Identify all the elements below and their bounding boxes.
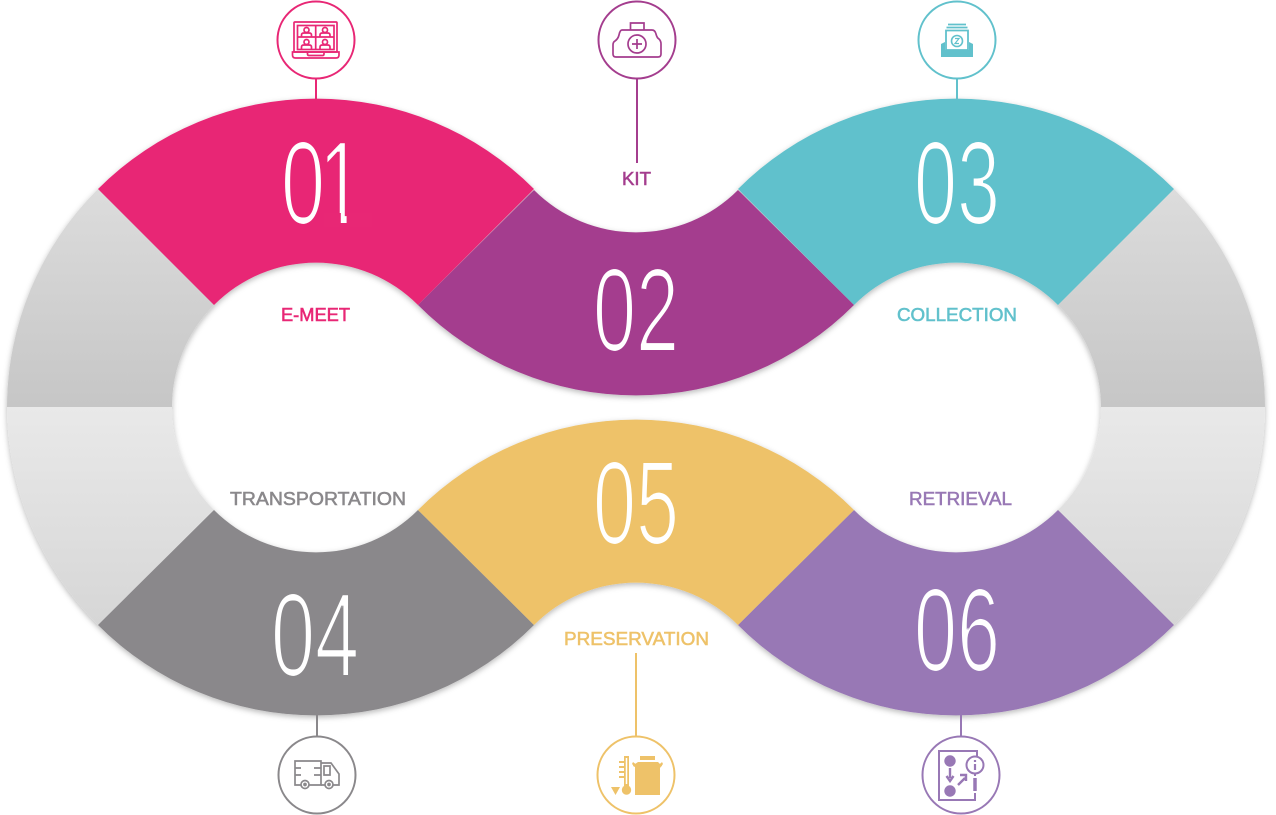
icon: e-meet laptop xyxy=(278,2,354,100)
number 02: 02 xyxy=(593,244,679,377)
infinity ribbon diagram xyxy=(7,99,1265,715)
band: lower left grey xyxy=(7,407,214,625)
icon: retrieval flow xyxy=(922,715,1000,814)
label: E-MEET: E-MEET xyxy=(281,305,350,325)
segment 03 xyxy=(738,99,1174,305)
number 04: 04 xyxy=(271,569,359,702)
number 05: 05 xyxy=(593,437,679,570)
label: COLLECTION: COLLECTION xyxy=(897,305,1017,325)
icon: medical kit xyxy=(598,2,676,163)
icon: delivery truck xyxy=(278,715,356,814)
band: upper right grey xyxy=(1058,189,1265,407)
band: lower right grey xyxy=(1058,407,1265,625)
label: RETRIEVAL: RETRIEVAL xyxy=(909,489,1012,509)
icon: collection inbox xyxy=(918,2,996,100)
segment 05 xyxy=(418,420,854,625)
segment 01 xyxy=(98,99,534,305)
label: TRANSPORTATION: TRANSPORTATION xyxy=(230,489,406,509)
number 06: 06 xyxy=(914,564,1000,697)
number 03: 03 xyxy=(914,117,1000,250)
segment 06 xyxy=(738,510,1174,715)
band: upper left grey xyxy=(7,189,214,407)
label: PRESERVATION: PRESERVATION xyxy=(564,629,709,649)
segment 02 xyxy=(418,190,854,395)
number 01: 01 xyxy=(281,118,363,250)
segment 04 xyxy=(98,510,534,715)
icon: cold preservation xyxy=(598,653,674,814)
label: KIT: KIT xyxy=(622,169,651,189)
